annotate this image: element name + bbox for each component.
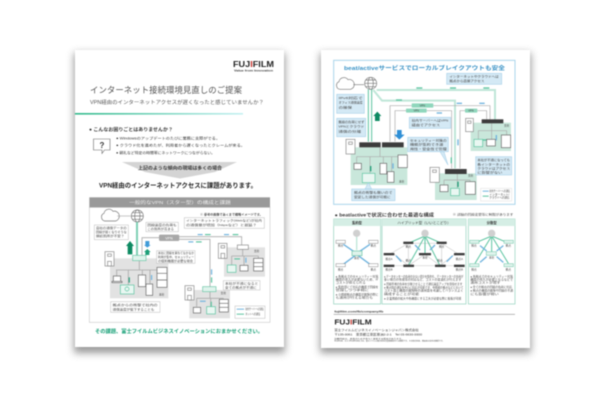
callout text: の確保 xyxy=(339,104,352,109)
VPN labels: VPN xyxy=(414,109,419,113)
panel: hybrid: 構成することが可能 xyxy=(384,292,420,296)
gradient divider xyxy=(75,113,243,115)
title: インターネット接続環境見直しのご提案 xyxy=(90,85,243,95)
callout text: 本社が不通になっても xyxy=(477,157,510,162)
gray down arrow xyxy=(122,162,237,178)
panel: hybrid: ● 拠点間の通信を中心に対応が可能です、中規模の拠点などにおいて xyxy=(384,286,464,290)
panel: distributed: 拠点 xyxy=(471,267,477,271)
panel: configuration options xyxy=(334,212,515,343)
callout text: VPNとクラウド xyxy=(338,124,364,129)
panel: distributed: 拠点 xyxy=(471,244,477,248)
legend: ネットへの通信 xyxy=(245,312,261,316)
trouble list xyxy=(116,136,245,155)
callout text: 通信の分離 xyxy=(338,128,361,133)
callout text: 拠点からの衝撃で社内の xyxy=(113,302,158,307)
panel: hybrid: コスト面と機器の故障時の運用面を考慮してバランスよく xyxy=(384,289,463,293)
panel: centralized: 集約型 xyxy=(352,220,363,225)
internet breakout line xyxy=(136,222,138,255)
site areas xyxy=(110,247,265,318)
network lines xyxy=(116,237,258,307)
panel: hybrid: ● 企業規模の拡大や各機器にする工夫が必要な際に拡張が可能 xyxy=(384,296,462,300)
callout text: の通信量が増加（httpsなど）と遅延？ xyxy=(186,222,257,227)
diagram header xyxy=(89,197,270,207)
icon: question bubble xyxy=(94,139,110,154)
panel: distributed: ● 拠点の機器の故障や回線の不通 xyxy=(470,289,513,293)
arrow: green upload xyxy=(126,241,134,254)
callout text: 用性・安全性で管理 xyxy=(410,146,447,151)
callout text: 安定した通信が可能に xyxy=(354,194,391,199)
callout text: 支社 xyxy=(254,249,260,253)
buildings xyxy=(105,243,227,300)
callout text: 回線速度の負荷も xyxy=(147,222,177,227)
legend: 社内サーバーへの通信 xyxy=(489,189,510,193)
VPN labels: VPN xyxy=(420,104,425,108)
gray down arrow: 上記のような傾向の現場は多くの場合 xyxy=(138,164,223,172)
callout text: オフィス通信速度 xyxy=(339,100,363,105)
buildings xyxy=(346,118,473,182)
legend xyxy=(237,307,264,316)
callout text: の個別機器が必要な場合 xyxy=(158,258,193,263)
callout text: 社内サーバーへはVPN xyxy=(412,118,448,123)
callout text: 無線の負荷にせず xyxy=(338,119,364,124)
callouts xyxy=(337,73,512,201)
panel: left document page xyxy=(74,50,285,353)
callout text xyxy=(96,212,263,311)
section heading: ● beat/activeで状況に合わせた最適な構成 xyxy=(335,212,435,219)
devices xyxy=(354,135,511,194)
panel: centralized: コストが抑えられる xyxy=(336,281,366,285)
callout text: 本社に回線を束ねてなかなか xyxy=(158,250,194,255)
panel: centralized: 拠点 xyxy=(338,267,344,271)
company address: 富士フイルムビジネスイノベーションジャパン株式会社 xyxy=(334,327,419,332)
callout text: 支社 xyxy=(468,174,474,178)
panel: centralized: 管理しつつ手軽に xyxy=(336,288,370,292)
panel: distributed: 分散型 xyxy=(487,220,497,225)
heading: troubles: ● こんなお困りごとはありませんか？ xyxy=(89,126,173,133)
callout text: に影響がない xyxy=(477,170,502,175)
panel: centralized: 本社 xyxy=(354,256,360,260)
callout text: 本社が不通になると xyxy=(225,280,258,285)
panel: centralized: ● 各拠点でのセキュリティー対策 xyxy=(336,275,379,279)
callout text: 機能が集約でき運 xyxy=(410,142,443,147)
panel: right document page xyxy=(320,50,531,353)
panel: hybrid: ● データセンターの負荷の少ない部分を集約化、データセンターの負荷が xyxy=(384,275,464,279)
trouble list: ● 朝礼など特定の時間帯にネットワークにつながらない。 xyxy=(116,150,215,155)
arrow: blue and green traffic xyxy=(144,241,151,255)
panel: distributed: 運用コストが増す xyxy=(470,281,501,285)
icon: internet globe xyxy=(117,210,143,222)
trouble list: ● Windowsのアップデートのたびに業務に支障がでる。 xyxy=(116,136,220,140)
legend: 社内サーバーへの通信 xyxy=(245,307,264,311)
note: ※ 詳細の回線変更等に制限があります xyxy=(453,213,514,217)
subtitle: VPN経由のインターネットアクセスが遅くなったと感じていませんか？ xyxy=(90,99,264,106)
panel: hybrid: 拠点 xyxy=(406,244,411,248)
callout text: 利用が集中、セキュリティー xyxy=(158,254,194,259)
panel: centralized xyxy=(334,219,381,304)
panel: centralized: 拠点 xyxy=(371,267,376,271)
diagram title: beat/activeサービスでローカルブレイクアウトも安全 xyxy=(344,64,505,72)
panel: centralized: 拠点 xyxy=(371,244,376,248)
panel: distributed: ● 各拠点でのセキュリティー対策 xyxy=(470,275,513,279)
routers xyxy=(359,119,503,174)
callout text: 回線が遅くなりそうな xyxy=(96,229,127,234)
panel: distributed: ● 全ての拠点の回線の負荷に対応 xyxy=(470,285,512,289)
legend xyxy=(481,188,512,201)
icon: globe xyxy=(353,77,377,89)
icon: question bubble: ? xyxy=(100,141,105,150)
traffic dashes xyxy=(129,234,246,307)
panel: distributed: 本社 xyxy=(489,256,495,260)
callout text: クラウドはアクセス xyxy=(477,166,510,171)
panel: hybrid: 拠点 xyxy=(406,259,411,263)
highlighted terminals xyxy=(362,139,483,196)
callout text: この箇所が高まる xyxy=(147,226,174,231)
callout text: ※ 参考の画像であくまで概略イメージです。 xyxy=(200,212,263,216)
panel: distributed: 機器の導入が必要となるなどで xyxy=(470,278,513,282)
logo: Fujifilm footer: FUJIFILM xyxy=(334,320,372,327)
callout text: インターネットやクラウドへは xyxy=(449,74,499,79)
panel: centralized: ● 小規模拠点の機器が故障の際に xyxy=(336,292,379,296)
legend: クラウドへの通信 xyxy=(489,196,510,200)
VPN labels: VPN xyxy=(468,109,474,113)
panel: distributed: にも影響が軽い xyxy=(470,292,499,296)
callout text: 自社の通信データの xyxy=(96,225,127,230)
icon: cloud xyxy=(337,78,354,89)
callout text: 各インターネットの xyxy=(477,161,510,166)
callout text: 全ての拠点が不通に xyxy=(225,284,257,289)
highlighted user terminals xyxy=(120,265,236,314)
callout text: 拠点から直接アクセス xyxy=(449,78,484,83)
company address: FUJIFILM、およびFUJIFILMロゴは、富士フイルム株式会社の登録商標または商標です。その他の社名、商品名は各社の商標です。 xyxy=(334,340,444,343)
legend: インターネット/ xyxy=(489,192,510,196)
arrow: blue down xyxy=(394,130,405,140)
panel: distributed: 拠点 xyxy=(506,267,511,271)
VPN hub label: VPN xyxy=(165,236,173,240)
callout text: IPv6対応で xyxy=(339,95,363,100)
panel: hybrid: 拠点 xyxy=(439,244,445,248)
panel: centralized: も運用が行える場合も xyxy=(336,295,373,299)
URL: fujifilm.com/fb/company/fb xyxy=(334,310,384,314)
site areas xyxy=(351,123,511,200)
callout text: 支社 xyxy=(221,291,226,295)
panel: hybrid: ハイブリッド型（いいとこどり） xyxy=(397,220,451,225)
callout text: インターネットトラフィック(Webなど)が社内 xyxy=(186,217,262,222)
panel: hybrid: 拠点A xyxy=(385,257,393,261)
panel: distributed: 拠点 xyxy=(506,244,511,248)
arrow: green up xyxy=(373,112,381,121)
callouts xyxy=(94,218,265,318)
callout text: 接続箇所が不安？ xyxy=(96,233,124,238)
panel: hybrid: 拠点B xyxy=(456,268,463,272)
panel: hybrid: 本社 xyxy=(422,256,428,260)
panel: local breakout diagram xyxy=(334,60,515,204)
logo: Fujifilm xyxy=(233,60,274,72)
callout text: 本社 xyxy=(399,180,405,184)
panel: centralized: 拠点 xyxy=(338,244,344,248)
panel: centralized: ● 集約部にて対応の機器で回線を xyxy=(336,285,379,289)
callout text: 経由でアクセス xyxy=(412,122,440,127)
panel: hybrid: 拠点B xyxy=(385,268,393,272)
callout text: 本社 xyxy=(159,292,165,296)
headline message: VPN経由のインターネットアクセスに課題があります。 xyxy=(99,180,257,190)
company address: 記載内容は、改良のため予告なく変更する場合があります。 xyxy=(334,337,404,340)
traffic dashes xyxy=(370,87,497,187)
logo: Fujifilm: FUJ IFILM xyxy=(233,60,274,69)
company address: 〒135-0061 東京都江東区豊洲2-2-1 Tel 03-6630-0000 xyxy=(334,332,422,337)
company address xyxy=(334,327,444,343)
panel: hybrid: 拠点 xyxy=(437,259,443,263)
panel: centralized: 機器の導入が必要ないため、IT xyxy=(336,278,379,282)
callout text: 通信速度が低下することも xyxy=(113,306,154,311)
icon: cloud xyxy=(102,209,119,221)
panel: star VPN diagram xyxy=(89,197,270,322)
VPN gray lines xyxy=(357,106,507,188)
panel: hybrid: 拠点A xyxy=(456,257,463,261)
devices xyxy=(112,258,263,313)
VPN hub label xyxy=(159,235,179,241)
breakout lines xyxy=(368,89,495,168)
panel: hybrid: 多い場合の性能等の対応など、コストの最適化が行えます xyxy=(384,278,462,282)
callout text xyxy=(338,74,510,199)
callout text: セキュリティー対策の xyxy=(410,137,447,142)
routers xyxy=(133,245,248,292)
callout text: 拠点の衝撃も無いので xyxy=(354,190,392,195)
logo: Fujifilm: Value from Innovation xyxy=(234,68,273,72)
callout text: 支社 xyxy=(504,124,510,128)
VPN labels xyxy=(406,103,477,113)
diagram header: 一般的なVPN（スター型）の構成と課題 xyxy=(129,199,232,206)
panel: hybrid: ● 回線帯域の負荷を分散させることで通信速度アップを目指せます xyxy=(384,282,463,286)
panel: distributed xyxy=(468,219,515,304)
footer message: その課題、富士フイルムビジネスイノベーションにおまかせください。 xyxy=(95,327,263,335)
panel: hybrid xyxy=(382,219,466,304)
trouble list: ● クラウド化を進めたが、利用者から遅くなったとクレームが来る。 xyxy=(116,142,245,148)
